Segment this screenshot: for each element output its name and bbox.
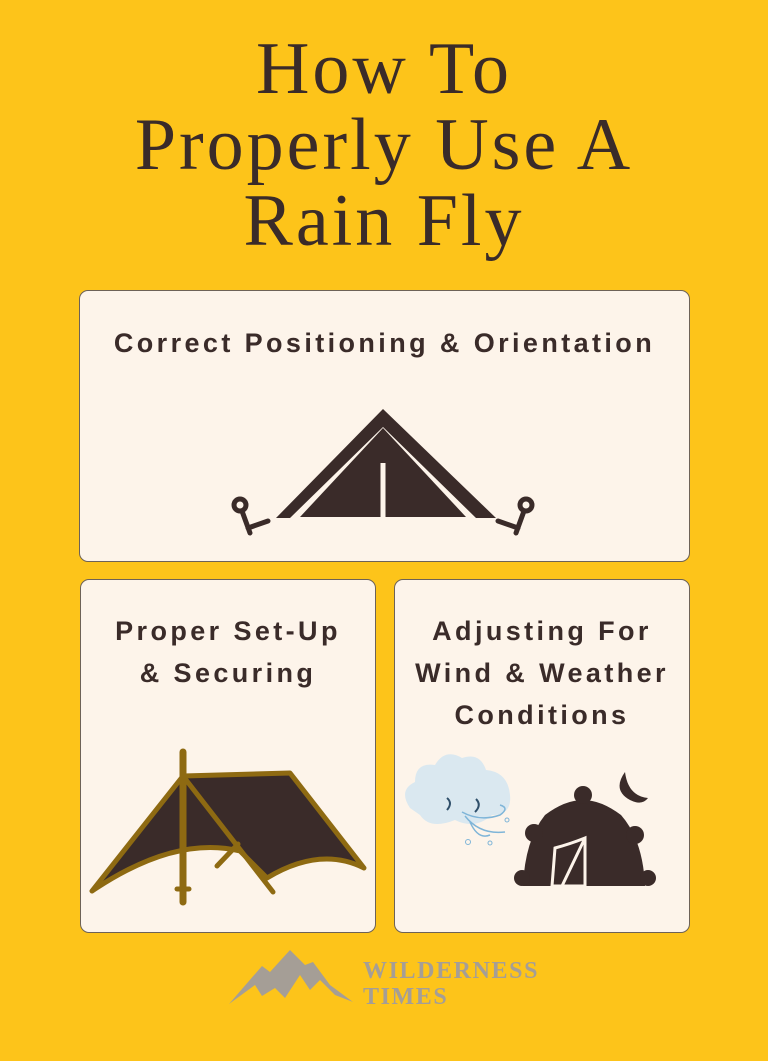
icon: dome tent with moon xyxy=(514,772,656,886)
icon: tarp shelter xyxy=(92,752,364,902)
logo xyxy=(229,950,539,1010)
heading: wind: Adjusting For xyxy=(432,616,652,646)
title: Rain Fly xyxy=(244,180,524,262)
heading: wind: Wind & Weather xyxy=(415,658,669,688)
heading: positioning: Correct Positioning & Orientation xyxy=(114,328,655,358)
logo: WILDERNESS xyxy=(363,958,539,984)
heading: setup: & Securing xyxy=(140,658,316,688)
title: Properly Use A xyxy=(135,104,633,186)
heading: setup xyxy=(115,616,341,688)
title: How To xyxy=(256,28,512,110)
icon: tent with pegs xyxy=(234,409,532,533)
logo: TIMES xyxy=(363,984,448,1010)
panel: positioning xyxy=(79,290,690,562)
panel: wind xyxy=(394,579,690,933)
title xyxy=(135,28,633,262)
panel: setup xyxy=(80,579,376,933)
heading: wind xyxy=(415,616,669,730)
heading: setup: Proper Set-Up xyxy=(115,616,341,646)
heading: wind: Conditions xyxy=(454,700,629,730)
icon: wind cloud xyxy=(405,754,510,845)
